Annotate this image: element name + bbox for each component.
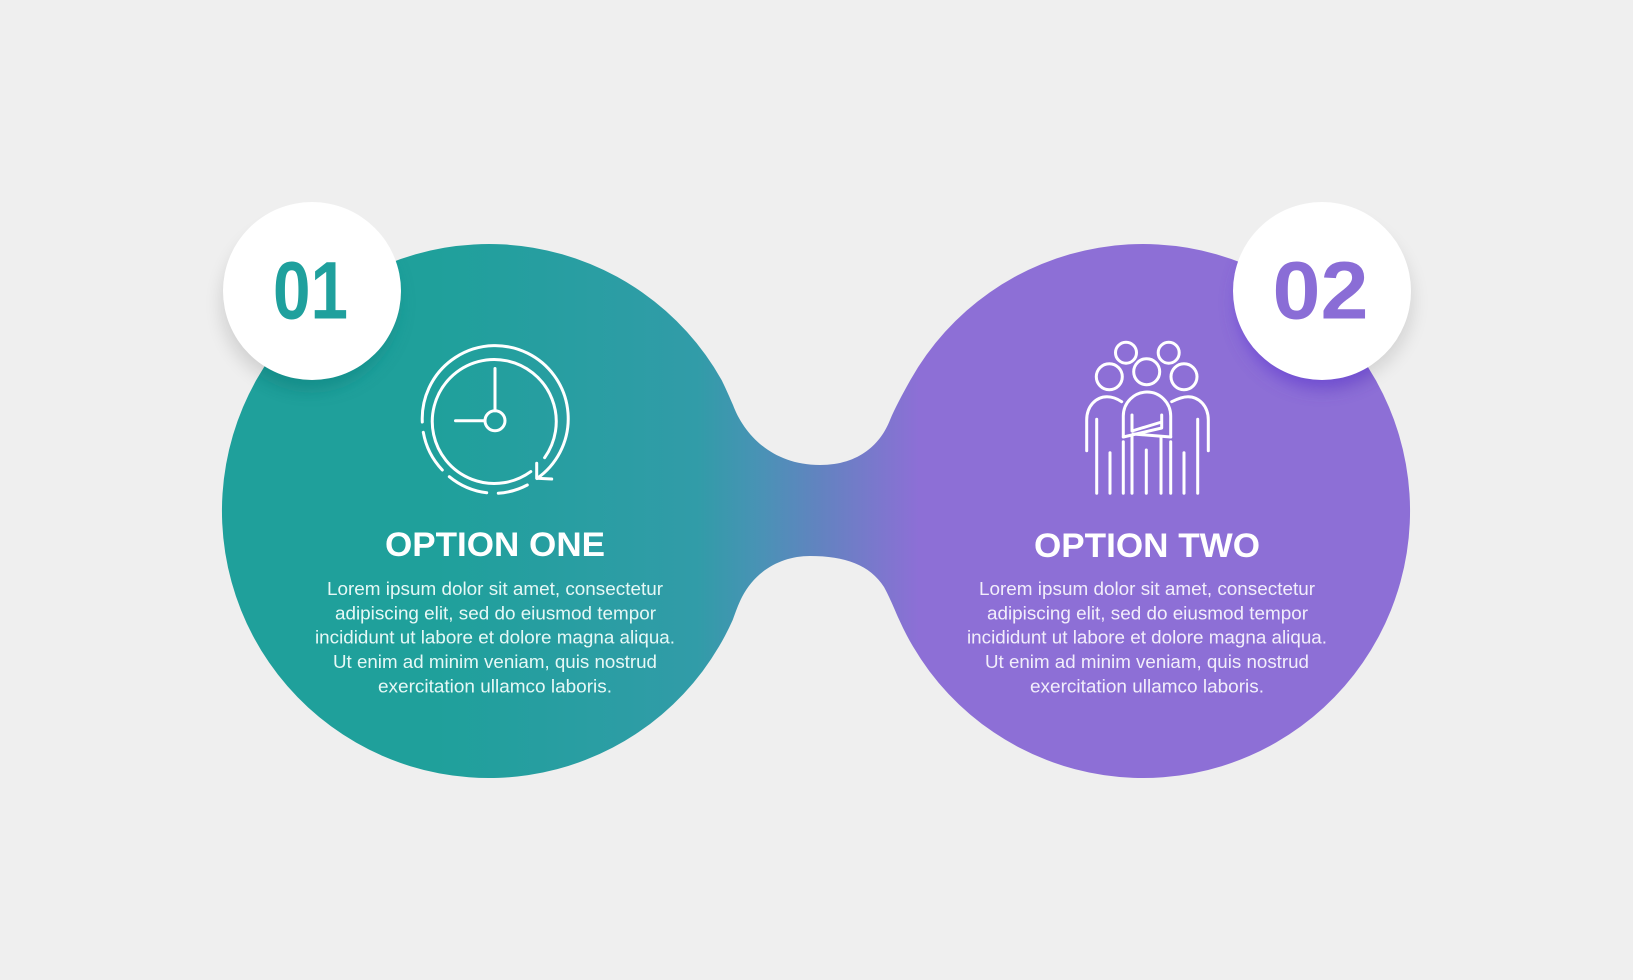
text block: option one description xyxy=(315,578,675,696)
badge: 02 xyxy=(1233,202,1411,380)
text block: option two description: Ut enim ad minim veniam, quis nostrud xyxy=(985,651,1309,672)
heading: option one: OPTION ONE xyxy=(385,526,605,564)
panel: option one xyxy=(223,202,675,696)
infographic canvas xyxy=(217,202,1416,778)
connected circles panel xyxy=(222,244,1410,778)
text block: option two description xyxy=(967,578,1327,696)
text block: option two description: adipiscing elit, sed do eiusmod tempor xyxy=(987,602,1308,623)
icon: clock with circular arrow xyxy=(422,346,568,493)
shadow: badge one xyxy=(222,222,386,386)
text block: option one description: incididunt ut labore et dolore magna aliqua. xyxy=(315,627,675,648)
text block: option two description: Lorem ipsum dolor sit amet, consectetur xyxy=(979,578,1315,599)
badge: 01 xyxy=(223,202,401,380)
badge: 01: 01 xyxy=(273,246,348,336)
text block: option one description: exercitation ullamco laboris. xyxy=(378,676,612,696)
text block: option two description: exercitation ullamco laboris. xyxy=(1030,676,1264,696)
text block: option one description: Ut enim ad minim veniam, quis nostrud xyxy=(333,651,657,672)
shadow: badge two xyxy=(1248,220,1412,384)
text block: option one description: adipiscing elit, sed do eiusmod tempor xyxy=(335,602,656,623)
badge: 02: 02 xyxy=(1272,246,1368,336)
shadow tint on panel xyxy=(228,219,1406,387)
panel: option two xyxy=(967,202,1411,696)
text block: option one description: Lorem ipsum dolor sit amet, consectetur xyxy=(327,578,663,599)
icon: group of people xyxy=(1087,342,1208,493)
text block: option two description: incididunt ut labore et dolore magna aliqua. xyxy=(967,627,1327,648)
heading: option two: OPTION TWO xyxy=(1034,527,1260,565)
